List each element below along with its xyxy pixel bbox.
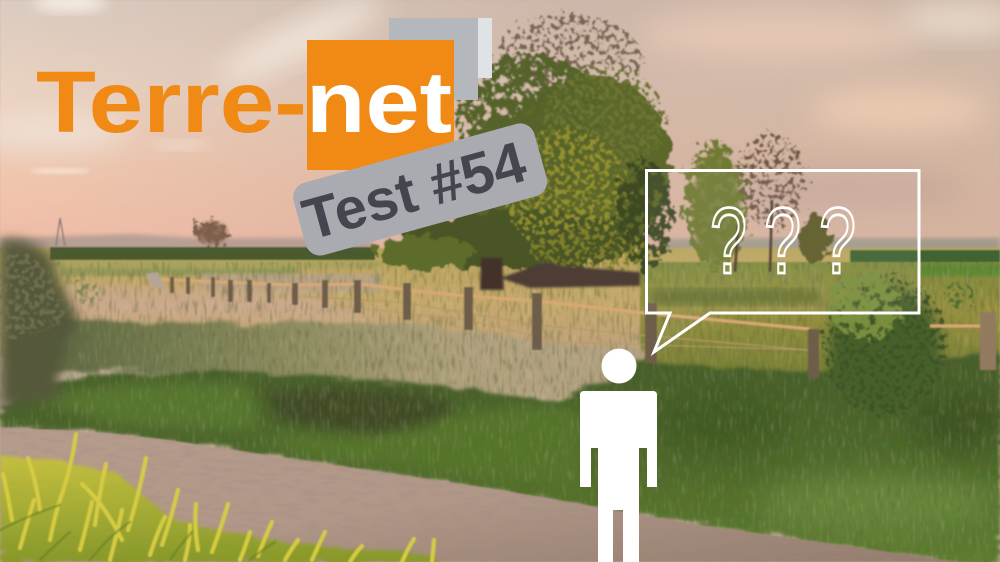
background: right tree group — [684, 132, 831, 272]
speech bubble with question marks: ? — [819, 188, 856, 293]
speech bubble with question marks: ? — [764, 188, 801, 293]
speech bubble with question marks: ? — [710, 188, 747, 293]
background: green bank — [0, 352, 1000, 562]
background: sky — [0, 0, 1000, 250]
background: distant field and hedges — [0, 247, 1000, 400]
logo: Terre-net wordmark: Terre- — [36, 54, 307, 151]
background: left bush — [0, 239, 102, 410]
background: large tree — [375, 14, 673, 272]
background: right bush — [823, 271, 976, 417]
badge: Test #54: Test #54 — [296, 129, 533, 253]
logo: Terre-net wordmark — [36, 54, 452, 151]
icon: white standing person — [580, 348, 657, 562]
background: distant hills — [0, 218, 1000, 252]
logo: grey L-shaped backing — [389, 18, 492, 100]
logo: orange square — [307, 40, 454, 170]
background: reed band — [30, 320, 645, 402]
logo: Terre-net wordmark: net — [306, 54, 452, 151]
background: ground texture — [0, 262, 1000, 562]
speech bubble with question marks — [646, 170, 919, 352]
background: foreground grass — [0, 434, 440, 562]
background: dirt road — [0, 428, 960, 562]
background: wooden fence — [146, 272, 996, 378]
tree trunk — [480, 258, 640, 290]
